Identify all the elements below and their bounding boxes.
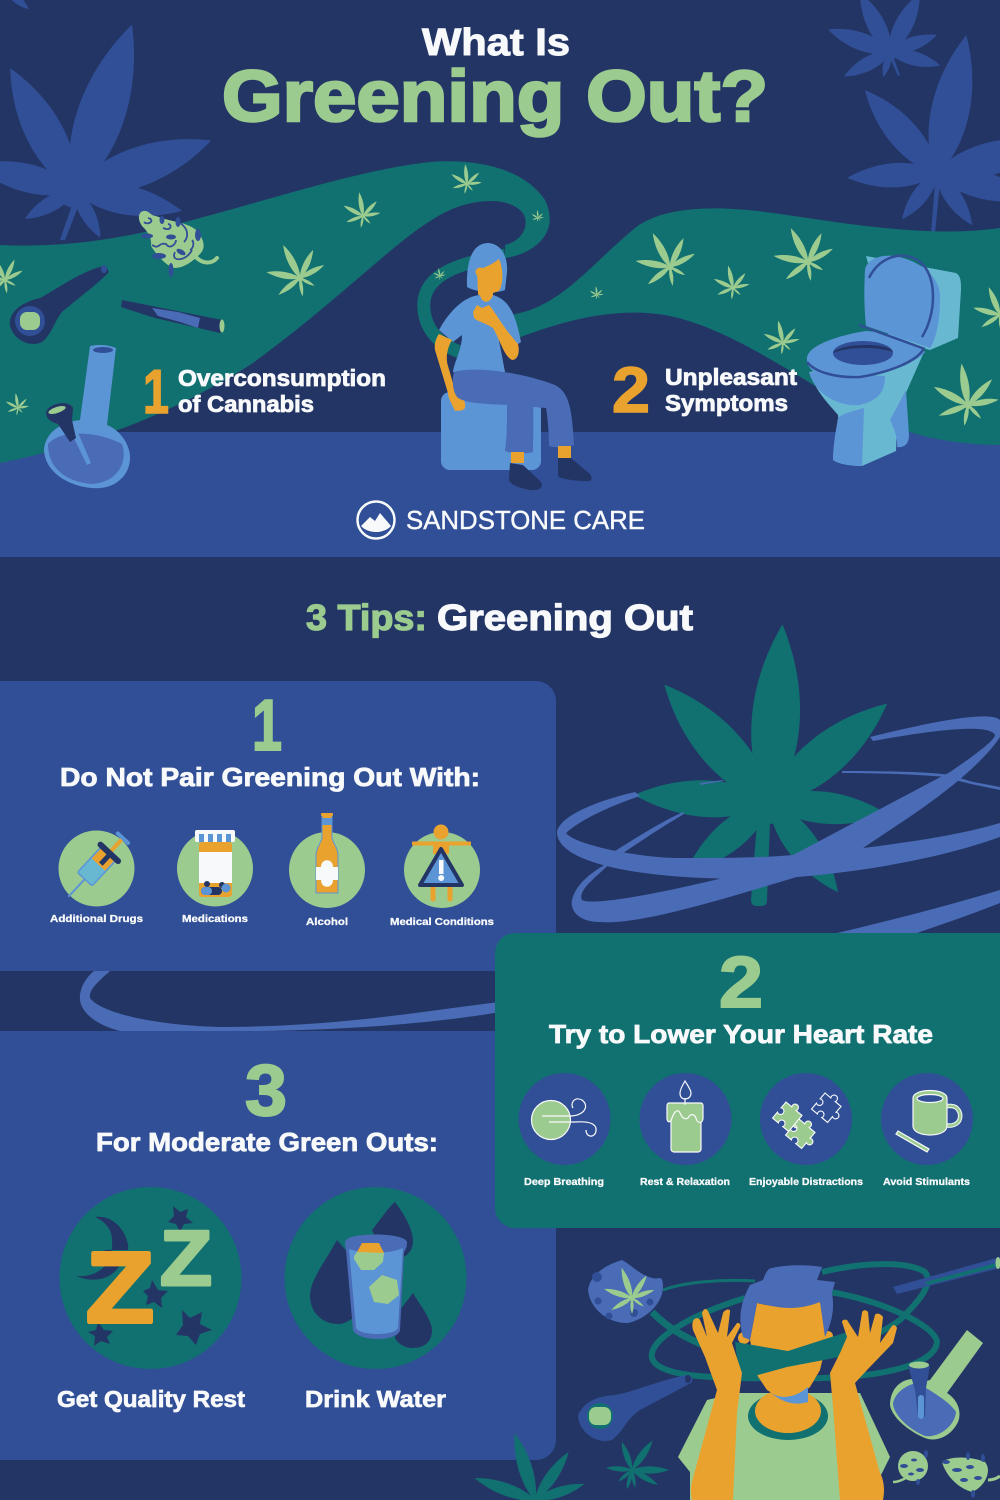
icon: rest and relaxation	[640, 1073, 732, 1165]
icon: enjoyable distractions	[760, 1073, 852, 1165]
label avoid stimulants: Avoid Stimulants	[883, 1176, 970, 1188]
heading tip 2: Try to Lower Your Heart Rate	[549, 1019, 933, 1049]
icon: cannabis buds	[893, 1450, 1000, 1498]
step 1 label: Overconsumption	[178, 365, 386, 391]
logo	[358, 502, 645, 538]
letter Z green: Z	[160, 1214, 212, 1302]
step 2 label	[612, 354, 797, 426]
label drink water: Drink Water	[305, 1386, 446, 1412]
person sitting	[435, 243, 592, 490]
label medications: Medications	[182, 913, 248, 925]
label alcohol: Alcohol	[306, 916, 348, 928]
section heading	[306, 597, 693, 638]
icon: joint blue	[893, 1257, 1000, 1294]
icon: avoid stimulants	[881, 1073, 973, 1165]
title: Greening Out?	[222, 57, 768, 137]
bottom leaves	[465, 1424, 669, 1500]
step 2 label: Symptoms	[665, 390, 788, 416]
icon: deep breathing	[518, 1073, 610, 1165]
numeral 2: 2	[719, 943, 763, 1023]
step 1 label: 1	[143, 358, 169, 427]
title	[222, 22, 768, 137]
icon: edible cookie	[588, 1260, 663, 1323]
numeral 1: 1	[252, 686, 282, 766]
label medical conditions: Medical Conditions	[390, 916, 494, 928]
icon: bong green	[890, 1330, 983, 1439]
icon: drink water	[284, 1187, 466, 1369]
section heading: Greening Out	[437, 597, 693, 638]
heading tip 1: Do Not Pair Greening Out With:	[60, 762, 480, 792]
letter Z orange: Z	[86, 1232, 154, 1344]
icon: pipe	[10, 265, 108, 344]
label quality rest: Get Quality Rest	[57, 1386, 245, 1412]
floor band	[0, 432, 1000, 557]
icon: additional drugs	[57, 827, 135, 907]
label deep breathing: Deep Breathing	[524, 1176, 604, 1188]
step 2 label: 2	[612, 354, 650, 426]
label additional drugs: Additional Drugs	[50, 913, 143, 925]
icon: pipe blue	[578, 1375, 692, 1441]
icon: quality rest	[60, 1187, 242, 1369]
step 1 label	[143, 358, 386, 427]
icon: toilet	[807, 256, 961, 466]
label enjoyable distractions: Enjoyable Distractions	[749, 1176, 863, 1188]
icon: joint	[121, 300, 224, 333]
icon: cannabis bud	[139, 211, 217, 277]
step 2 label: Unpleasant	[665, 364, 797, 390]
panel: tip 3	[0, 1031, 556, 1460]
big teal leaf with swirl	[557, 623, 1000, 933]
small green leaves	[0, 160, 1000, 434]
numeral 3: 3	[245, 1051, 287, 1131]
icon: medical conditions	[404, 824, 480, 908]
decorative background leaves	[0, 0, 1000, 241]
title: What Is	[422, 22, 570, 64]
dizzy swirl	[652, 1264, 937, 1378]
icon: medications	[177, 830, 253, 906]
icon: alcohol	[289, 813, 365, 908]
heading tip 3: For Moderate Green Outs:	[96, 1127, 438, 1157]
section heading: 3 Tips:	[306, 597, 427, 638]
label rest and relaxation: Rest & Relaxation	[640, 1176, 730, 1188]
swirl between panels	[80, 971, 500, 1031]
panel: tip 1	[0, 681, 556, 971]
teal smoke swoosh	[0, 161, 1000, 463]
panel: tip 2	[495, 933, 1000, 1228]
icon: bong	[44, 345, 130, 488]
man covering eyes	[678, 1265, 897, 1500]
step 1 label: of Cannabis	[178, 391, 314, 417]
logo: SANDSTONE CARE	[406, 505, 645, 535]
